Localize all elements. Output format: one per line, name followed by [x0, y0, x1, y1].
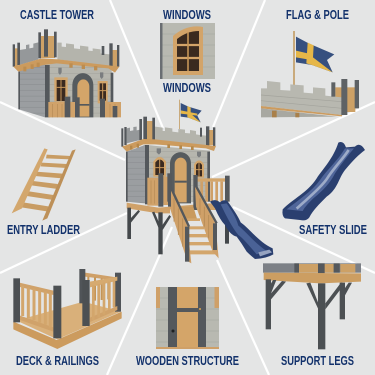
support legs	[127, 208, 229, 254]
panel: entry ladder	[7, 148, 80, 237]
deck and railings	[127, 173, 230, 213]
heading: windows top: WINDOWS	[163, 8, 211, 22]
panel: deck and railings	[13, 269, 122, 368]
window close-up	[160, 23, 215, 79]
door frame close-up	[156, 287, 219, 349]
panel: support legs	[263, 263, 361, 368]
support legs illustration	[263, 263, 361, 349]
panel: wooden structure	[136, 287, 239, 368]
panel: windows	[160, 8, 215, 95]
flag	[179, 100, 202, 129]
deck and railings illustration	[13, 269, 122, 349]
safety slide illustration	[282, 142, 365, 220]
panel: flag and pole	[261, 8, 359, 117]
central castle playhouse	[121, 100, 273, 263]
heading: entry ladder: ENTRY LADDER	[7, 223, 80, 237]
heading: windows lower: WINDOWS	[163, 81, 211, 95]
heading: deck and railings: DECK & RAILINGS	[16, 354, 99, 368]
flag on battlement illustration	[261, 31, 359, 117]
tower battlements	[121, 117, 215, 147]
entry ladder illustration	[12, 148, 76, 221]
safety slide	[210, 200, 273, 259]
entry stairs	[168, 183, 219, 263]
windows and door	[153, 152, 204, 203]
panel: safety slide	[282, 142, 367, 237]
heading: wooden structure: WOODEN STRUCTURE	[136, 354, 239, 368]
heading: castle tower: CASTLE TOWER	[20, 8, 94, 22]
panel: castle tower	[13, 8, 121, 117]
tower walls	[122, 139, 216, 204]
heading: flag and pole: FLAG & POLE	[286, 8, 349, 22]
castle tower illustration	[13, 29, 121, 117]
